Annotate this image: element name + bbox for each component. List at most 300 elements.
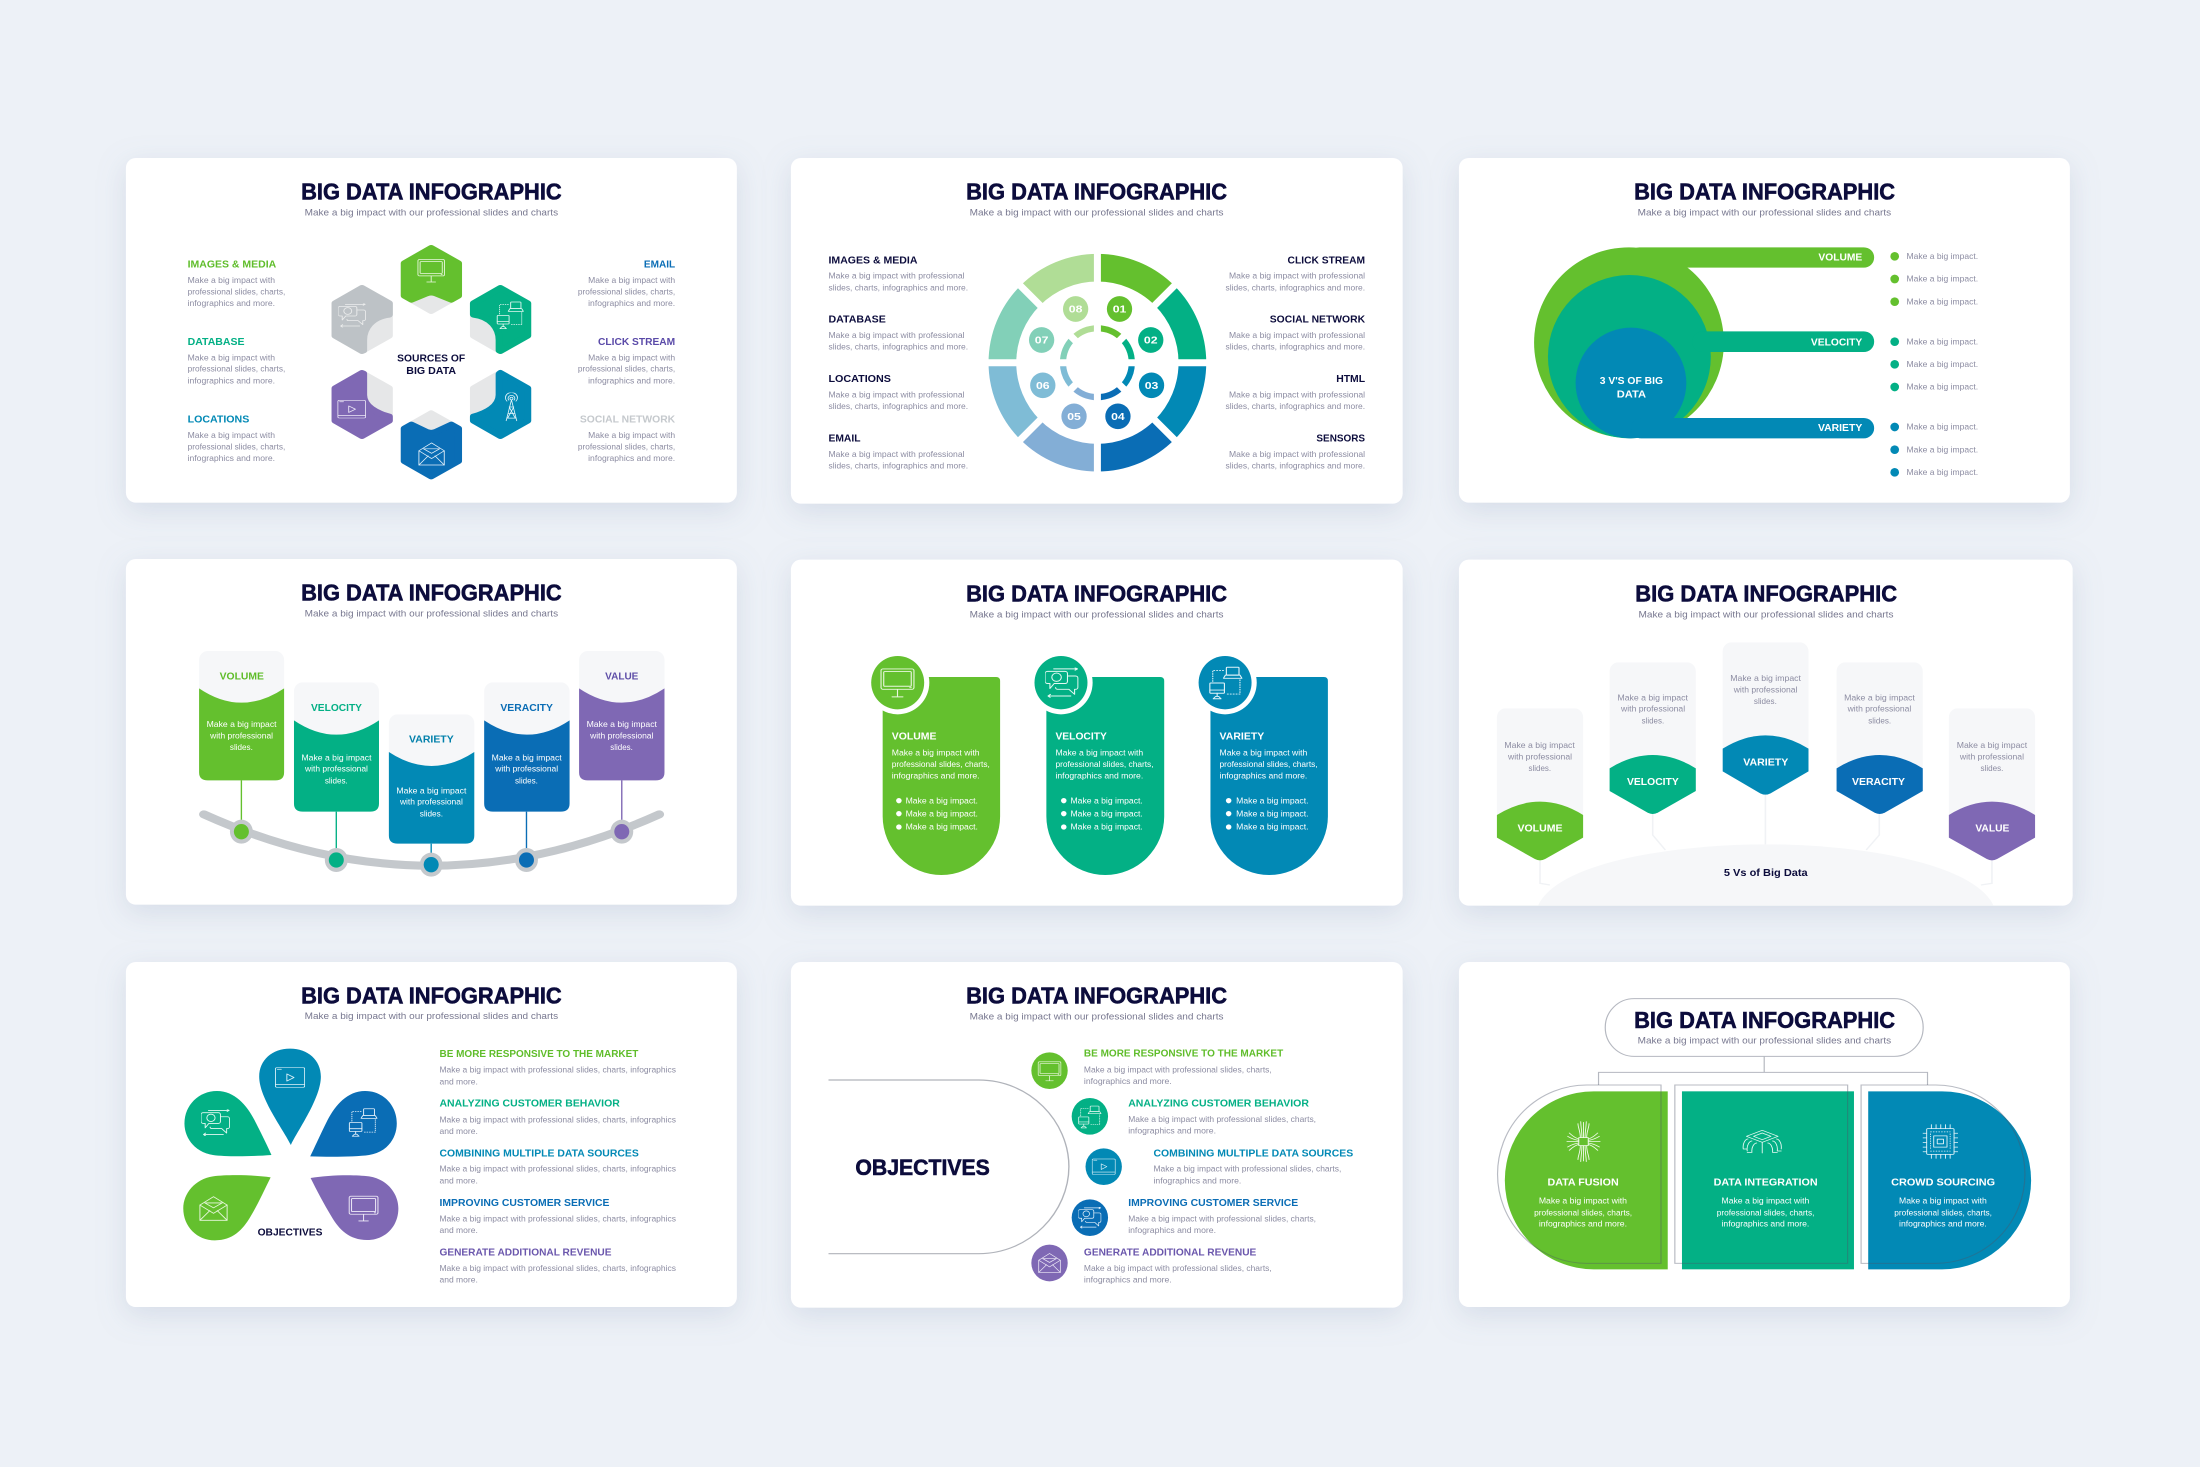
text: analyzing customer behavior: ANALYZING CUSTOMER BEHAVIOR [1128, 1098, 1309, 1109]
bullets: variety: Make a big impact. [1907, 422, 1978, 431]
block: data fusion: professional slides, charts, [1534, 1208, 1632, 1217]
text: html: slides, charts, infographics and more. [1225, 402, 1365, 411]
icon: tower [505, 392, 517, 421]
icon: monitor [349, 1196, 378, 1221]
center label [1600, 376, 1663, 400]
petal: top [259, 1049, 321, 1145]
card: velocity: Make a big impact [1618, 693, 1688, 702]
text: images and media: professional slides, charts, [188, 287, 285, 296]
petal: lower left [183, 1175, 271, 1240]
card: volume: Make a big impact [1504, 741, 1575, 750]
icon: chat [1045, 668, 1078, 698]
petal: upper right [310, 1091, 397, 1157]
card: variety [1193, 651, 1328, 875]
title pill: Make a big impact with our professional slides and charts [1638, 1036, 1891, 1046]
card: variety [1723, 642, 1808, 795]
card: volume: with professional [209, 731, 273, 740]
card: value: slides. [1980, 764, 2003, 773]
text: click stream: professional slides, charts, [578, 364, 675, 373]
icon: monitor [881, 669, 914, 697]
text: be more responsive: infographics and more. [1084, 1077, 1172, 1086]
text: generate additional revenue: GENERATE ADDITIONAL REVENUE [439, 1247, 612, 1258]
card: velocity: Make a big impact. [1070, 796, 1143, 805]
panel: 5 Vs of big data [1459, 560, 2073, 906]
card: veracity: VERACITY [1852, 777, 1905, 788]
numbered circles: 08 [1069, 304, 1082, 315]
card: velocity: VELOCITY [1055, 731, 1107, 742]
card: volume: infographics and more. [892, 771, 980, 780]
numbered circles: 05 [1067, 412, 1081, 423]
icon: chat [338, 303, 366, 327]
title [966, 983, 1227, 1022]
text: social network: professional slides, charts, [578, 442, 675, 451]
variety shape [1576, 328, 1874, 438]
text: analyzing customer behavior [1128, 1098, 1316, 1135]
text: html: HTML [1336, 374, 1365, 385]
text: analyzing customer behavior: Make a big impact with professional slides, charts, infographics [439, 1115, 676, 1124]
block: data integration: DATA INTEGRATION [1714, 1177, 1818, 1188]
block: data integration [1682, 1091, 1854, 1269]
card: volume: Make a big impact. [906, 796, 978, 805]
text: database: professional slides, charts, [188, 364, 285, 373]
text: combining multiple data sources: Make a big impact with professional slides, charts, infographics [439, 1164, 676, 1173]
title pill [1605, 999, 1923, 1056]
text: click stream [1225, 255, 1365, 292]
card: velocity [1610, 662, 1696, 814]
card: velocity: slides. [1642, 716, 1664, 725]
text: social network: slides, charts, infographics and more. [1225, 342, 1365, 351]
arc [204, 814, 659, 866]
text: database [828, 314, 968, 351]
card: volume: slides. [1529, 764, 1551, 773]
title [301, 580, 562, 619]
node: envelope [1031, 1245, 1068, 1281]
card: variety: Make a big impact [1730, 674, 1801, 683]
card [1459, 560, 2073, 906]
bullets: volume: Make a big impact. [1907, 297, 1978, 306]
text: database [188, 337, 285, 385]
bullets: velocity: Make a big impact. [1907, 337, 1978, 346]
card [126, 559, 737, 905]
node: chat [1072, 1199, 1108, 1236]
text: be more responsive [439, 1049, 676, 1086]
center label: DATA [1617, 389, 1646, 400]
card: velocity: with professional [304, 764, 368, 773]
block: crowd sourcing: infographics and more. [1899, 1219, 1987, 1228]
text: images and media: Make a big impact with [188, 276, 275, 285]
panel: objectives petals [126, 962, 737, 1307]
text: social network: Make a big impact with professional [1229, 331, 1365, 340]
text: analyzing customer behavior: Make a big impact with professional slides, charts, [1128, 1115, 1316, 1124]
title: BIG DATA INFOGRAPHIC [966, 983, 1227, 1009]
text: improving customer service [1128, 1198, 1316, 1235]
card [791, 560, 1403, 906]
card: variety: slides. [420, 809, 443, 818]
bullets: volume: Make a big impact. [1907, 274, 1978, 283]
text: html: Make a big impact with professional [1229, 390, 1365, 399]
icon: network [497, 302, 523, 329]
numbered circles: 02 [1144, 335, 1158, 346]
text: locations: professional slides, charts, [188, 442, 285, 451]
card: value [1949, 708, 2035, 860]
outline shape [828, 1080, 1069, 1254]
text: analyzing customer behavior: infographics and more. [1128, 1126, 1216, 1135]
text: combining multiple data sources: COMBINING MULTIPLE DATA SOURCES [439, 1148, 639, 1159]
center label: 3 V'S OF BIG [1600, 376, 1663, 387]
text: improving customer service: Make a big impact with professional slides, charts, infographics [439, 1214, 676, 1223]
text: images and media: IMAGES & MEDIA [828, 255, 917, 266]
center label [397, 353, 465, 377]
card [1459, 158, 2070, 503]
text: be more responsive: and more. [439, 1077, 478, 1086]
text: improving customer service: Make a big impact with professional slides, charts, [1128, 1214, 1316, 1223]
text: generate additional revenue: GENERATE ADDITIONAL REVENUE [1084, 1247, 1257, 1258]
bullets: variety: Make a big impact. [1907, 468, 1978, 477]
text: email: professional slides, charts, [578, 287, 675, 296]
text: sensors: slides, charts, infographics and more. [1225, 461, 1365, 470]
block: data integration: professional slides, charts, [1717, 1208, 1814, 1217]
text: be more responsive: Make a big impact with professional slides, charts, infographics [439, 1065, 676, 1074]
objectives label: OBJECTIVES [855, 1156, 990, 1180]
numbered circles [1029, 296, 1164, 429]
node: video screen [1086, 1148, 1122, 1185]
card: variety: slides. [1754, 697, 1777, 706]
panel: five Vs on arc [126, 559, 737, 905]
card: velocity: Make a big impact. [1070, 809, 1143, 818]
text: html [1225, 374, 1365, 411]
text: click stream [578, 337, 675, 385]
text: locations: slides, charts, infographics and more. [828, 402, 968, 411]
bullets: volume: Make a big impact. [1907, 252, 1978, 261]
card: volume: slides. [230, 743, 253, 752]
title: BIG DATA INFOGRAPHIC [966, 179, 1227, 205]
title [301, 983, 562, 1022]
card: velocity: Make a big impact with [1055, 748, 1143, 757]
card: variety: Make a big impact [396, 786, 467, 795]
label: variety: VARIETY [1818, 423, 1863, 434]
text: email: EMAIL [644, 259, 675, 270]
card: veracity: Make a big impact [1844, 693, 1915, 702]
title: Make a big impact with our professional slides and charts [970, 1012, 1224, 1022]
chart: segmented ring [982, 248, 1212, 478]
card: variety: with professional [399, 797, 463, 806]
bullets: velocity [1890, 337, 1978, 391]
title [966, 179, 1227, 218]
block: data fusion [1505, 1091, 1668, 1269]
text: be more responsive [1084, 1048, 1283, 1086]
panel: three rounded cards [791, 560, 1403, 906]
bullets: variety [1890, 422, 1978, 477]
panel: data fusion, integration, crowd sourcing [1459, 962, 2070, 1307]
title: BIG DATA INFOGRAPHIC [301, 179, 562, 205]
outline shapes [1498, 1085, 2025, 1263]
text: sensors [1225, 433, 1365, 470]
label: volume: VOLUME [1818, 252, 1863, 263]
text: click stream: CLICK STREAM [598, 337, 675, 348]
text: combining multiple data sources: infographics and more. [1154, 1176, 1241, 1185]
velocity shape [1548, 275, 1874, 438]
text: improving customer service: IMPROVING CUSTOMER SERVICE [439, 1198, 610, 1209]
text: social network: SOCIAL NETWORK [580, 414, 676, 425]
center label: BIG DATA [406, 366, 456, 377]
card: velocity: slides. [325, 776, 348, 785]
panel: 3 Vs of big data [1459, 158, 2070, 503]
title: BIG DATA INFOGRAPHIC [301, 983, 562, 1009]
text: generate additional revenue: Make a big impact with professional slides, charts, [1084, 1264, 1272, 1273]
connector lines [1599, 1056, 1928, 1085]
card: variety: Make a big impact with [1220, 748, 1307, 757]
text: email: Make a big impact with [588, 276, 675, 285]
text: combining multiple data sources [1154, 1148, 1354, 1185]
card: veracity: slides. [515, 776, 538, 785]
text: generate additional revenue: Make a big impact with professional slides, charts, infographics [439, 1264, 676, 1273]
text: database: DATABASE [188, 337, 245, 348]
center label: SOURCES OF [397, 353, 465, 364]
card: variety: Make a big impact. [1236, 822, 1309, 831]
card: velocity [294, 682, 379, 872]
card: value: with professional [589, 731, 653, 740]
text: combining multiple data sources: Make a big impact with professional slides, charts, [1154, 1164, 1341, 1173]
block: data integration: Make a big impact with [1722, 1196, 1809, 1205]
title: BIG DATA INFOGRAPHIC [1635, 581, 1897, 607]
block: data fusion: infographics and more. [1539, 1219, 1627, 1228]
text: generate additional revenue [1084, 1247, 1272, 1284]
volume shape [1534, 247, 1874, 438]
text: database: DATABASE [828, 314, 886, 325]
card [126, 962, 737, 1307]
card: veracity [484, 682, 570, 872]
text: locations [828, 374, 968, 411]
icon: chip rays [1567, 1122, 1600, 1162]
text: social network: SOCIAL NETWORK [1270, 314, 1366, 325]
text: email [828, 433, 968, 470]
card: volume: Make a big impact with [892, 748, 980, 757]
icon: video screen [338, 400, 366, 418]
bullets: velocity: Make a big impact. [1907, 360, 1978, 369]
card: volume: VOLUME [220, 671, 264, 682]
title: BIG DATA INFOGRAPHIC [301, 580, 562, 606]
text: email: slides, charts, infographics and more. [828, 461, 968, 470]
card: velocity: infographics and more. [1055, 771, 1143, 780]
block: crowd sourcing: Make a big impact with [1899, 1196, 1987, 1205]
card: variety: VARIETY [1743, 757, 1789, 768]
text: social network [578, 414, 676, 463]
text: click stream: slides, charts, infographics and more. [1225, 283, 1365, 292]
card: value [579, 651, 664, 844]
numbered circles: 03 [1145, 381, 1158, 392]
card: veracity [1837, 662, 1923, 814]
card [1459, 962, 2070, 1307]
icon: network [349, 1109, 377, 1136]
card: volume [199, 651, 284, 844]
title: Make a big impact with our professional slides and charts [970, 208, 1224, 218]
card: value: VALUE [605, 671, 639, 682]
block: data fusion: DATA FUSION [1548, 1177, 1619, 1188]
text: improving customer service: IMPROVING CUSTOMER SERVICE [1128, 1198, 1299, 1209]
petal: upper left [184, 1091, 271, 1156]
connector lines [1540, 795, 1992, 885]
numbered circles: 04 [1111, 412, 1125, 423]
node: monitor [1031, 1052, 1068, 1089]
text: generate additional revenue [439, 1247, 676, 1284]
card [791, 158, 1403, 504]
text: database: Make a big impact with [188, 353, 275, 362]
icon: 3d chip [1743, 1130, 1781, 1153]
card: variety: professional slides, charts, [1220, 760, 1318, 769]
card: value: VALUE [1975, 823, 2010, 834]
title: Make a big impact with our professional slides and charts [1638, 208, 1891, 218]
hexagon: email [473, 288, 528, 351]
block: data fusion: Make a big impact with [1539, 1196, 1627, 1205]
hexagon: images and media [404, 248, 458, 311]
icon: envelope [200, 1197, 227, 1220]
text: generate additional revenue: infographics and more. [1084, 1275, 1172, 1284]
numbered circles: 06 [1036, 381, 1050, 392]
card: volume: professional slides, charts, [892, 760, 990, 769]
text: analyzing customer behavior: ANALYZING CUSTOMER BEHAVIOR [439, 1098, 620, 1109]
card: variety: Make a big impact. [1236, 809, 1309, 818]
hexagon: social network [404, 413, 458, 476]
text: locations: Make a big impact with [188, 431, 275, 440]
icon: video screen [275, 1068, 305, 1087]
text: combining multiple data sources: COMBINING MULTIPLE DATA SOURCES [1154, 1148, 1354, 1159]
icon: network [1210, 667, 1242, 699]
card: volume: Make a big impact. [906, 809, 978, 818]
text: email: Make a big impact with professional [828, 450, 965, 459]
icon: monitor [418, 259, 444, 282]
title [1634, 179, 1895, 218]
objectives label: OBJECTIVES [258, 1227, 323, 1238]
panel: sources of big data [126, 158, 737, 503]
dome: 5 Vs of Big Data [1724, 868, 1808, 879]
text: sensors: Make a big impact with professional [1229, 450, 1365, 459]
text: improving customer service [439, 1198, 676, 1235]
card: volume: VOLUME [892, 731, 937, 742]
block: crowd sourcing: CROWD SOURCING [1891, 1177, 1995, 1188]
text: combining multiple data sources [439, 1148, 676, 1185]
numbered circles: 01 [1113, 304, 1126, 315]
card: volume: Make a big impact. [906, 822, 978, 831]
panel: objectives list [791, 962, 1403, 1308]
text: combining multiple data sources: and more. [439, 1176, 478, 1185]
text: database: slides, charts, infographics and more. [828, 342, 968, 351]
card: veracity: Make a big impact [492, 753, 562, 762]
label: velocity: VELOCITY [1811, 337, 1863, 348]
text: analyzing customer behavior [439, 1098, 676, 1136]
card: veracity: VERACITY [500, 703, 553, 714]
card: variety: infographics and more. [1220, 771, 1307, 780]
text: images and media: IMAGES & MEDIA [188, 259, 276, 270]
text: improving customer service: and more. [439, 1226, 478, 1235]
text: click stream: infographics and more. [588, 376, 675, 385]
title: Make a big impact with our professional slides and charts [1638, 610, 1894, 620]
hexagon: locations [335, 373, 389, 436]
text: database: infographics and more. [188, 376, 275, 385]
card: veracity: with professional [1847, 704, 1911, 713]
title [301, 179, 562, 218]
hexagon: database [335, 288, 389, 351]
text: social network: infographics and more. [588, 454, 675, 463]
card: variety: VARIETY [1220, 731, 1265, 742]
card: velocity [1029, 651, 1164, 875]
text: images and media: slides, charts, infographics and more. [828, 283, 968, 292]
card: variety: with professional [1733, 685, 1797, 694]
card: volume: VOLUME [1517, 823, 1563, 834]
card: volume: Make a big impact [207, 720, 277, 729]
text: be more responsive: BE MORE RESPONSIVE TO THE MARKET [439, 1049, 638, 1060]
card: variety [389, 714, 474, 877]
title [966, 581, 1227, 620]
dome [1538, 844, 1994, 906]
title: BIG DATA INFOGRAPHIC [966, 581, 1227, 607]
card: veracity: slides. [1868, 716, 1891, 725]
card: value: Make a big impact [1957, 741, 2028, 750]
text: sensors: SENSORS [1316, 433, 1365, 444]
text: locations: LOCATIONS [828, 374, 891, 385]
title: Make a big impact with our professional slides and charts [305, 1012, 558, 1022]
text: locations: Make a big impact with professional [828, 390, 965, 399]
hexagon: click stream [473, 373, 528, 436]
card: value: with professional [1959, 752, 2024, 761]
panel: ring chart [791, 158, 1403, 504]
text: images and media: Make a big impact with professional [828, 271, 965, 280]
text: click stream: CLICK STREAM [1288, 255, 1365, 266]
card: variety: Make a big impact. [1236, 796, 1309, 805]
text: images and media [188, 259, 285, 308]
text: analyzing customer behavior: and more. [439, 1127, 478, 1136]
bullets: volume [1890, 252, 1978, 306]
text: database: Make a big impact with professional [828, 331, 965, 340]
card: velocity: professional slides, charts, [1055, 760, 1154, 769]
text: images and media: infographics and more. [188, 299, 275, 308]
card: velocity: with professional [1620, 704, 1685, 713]
text: click stream: Make a big impact with professional [1229, 271, 1365, 280]
title: Make a big impact with our professional slides and charts [305, 208, 558, 218]
text: locations: infographics and more. [188, 454, 275, 463]
title: BIG DATA INFOGRAPHIC [1634, 179, 1895, 205]
numbered circles: 07 [1035, 335, 1048, 346]
card: velocity: VELOCITY [311, 703, 362, 714]
text: click stream: Make a big impact with [588, 353, 675, 362]
block: data integration: infographics and more. [1722, 1219, 1809, 1228]
card: velocity: Make a big impact. [1070, 822, 1143, 831]
node: network [1072, 1098, 1108, 1135]
text: social network: Make a big impact with [588, 431, 675, 440]
text: locations [188, 414, 285, 463]
icon: chat [201, 1109, 230, 1136]
card: velocity: Make a big impact [301, 753, 372, 762]
bullets: variety: Make a big impact. [1907, 445, 1978, 454]
card: veracity: with professional [494, 764, 558, 773]
text: improving customer service: infographics and more. [1128, 1226, 1216, 1235]
text: be more responsive: Make a big impact with professional slides, charts, [1084, 1065, 1272, 1074]
icon: envelope [419, 443, 444, 465]
icon: cpu [1923, 1125, 1958, 1158]
card: velocity: VELOCITY [1627, 777, 1679, 788]
card: volume: with professional [1507, 752, 1572, 761]
card [126, 158, 737, 503]
title pill: BIG DATA INFOGRAPHIC [1634, 1008, 1895, 1033]
text: be more responsive: BE MORE RESPONSIVE TO THE MARKET [1084, 1048, 1283, 1059]
bullets: velocity: Make a big impact. [1907, 382, 1978, 391]
petal: lower right [311, 1175, 398, 1240]
text: social network [1225, 314, 1366, 351]
text: locations: LOCATIONS [188, 414, 250, 425]
card: value: Make a big impact [587, 720, 657, 729]
block: crowd sourcing: professional slides, charts, [1894, 1208, 1992, 1217]
title: Make a big impact with our professional slides and charts [305, 609, 558, 619]
card: volume [866, 651, 1000, 875]
